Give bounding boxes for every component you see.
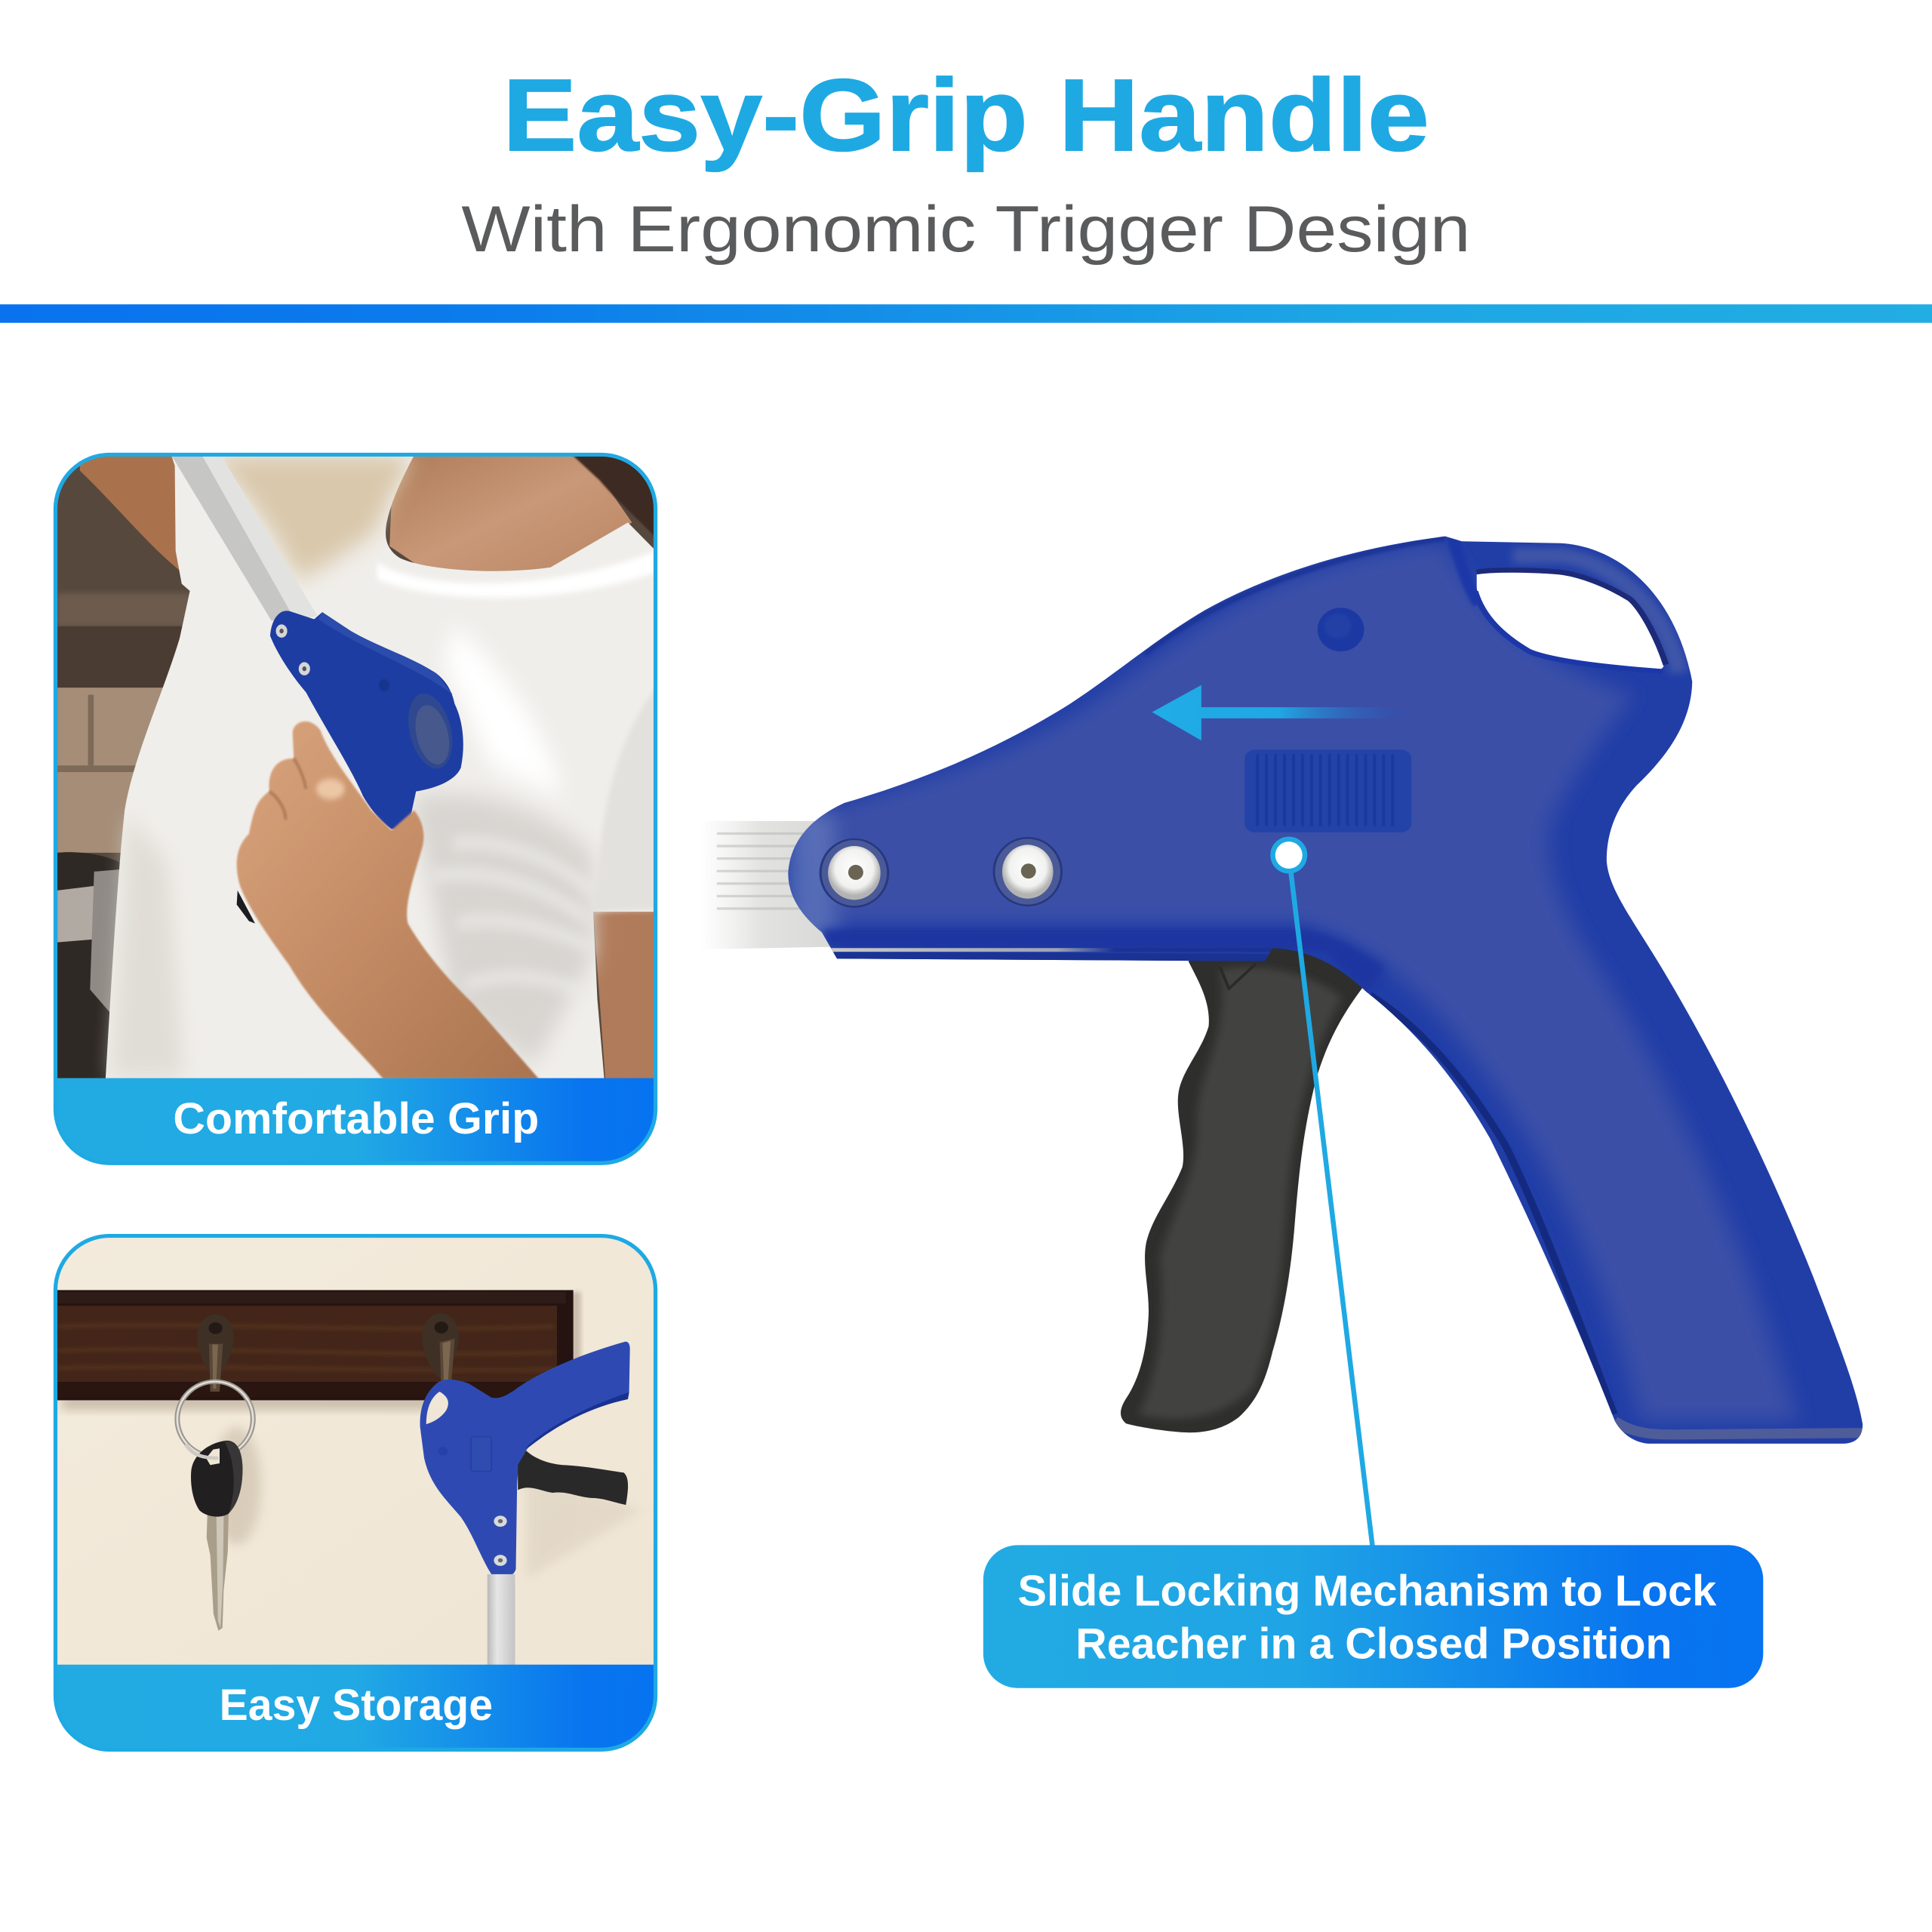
- card border: [55, 1236, 656, 1749]
- slide lock: [1244, 749, 1411, 832]
- reacher shaft: [171, 456, 318, 620]
- key blade: [207, 1514, 229, 1631]
- blue handle: [270, 611, 463, 829]
- key fob: [191, 1441, 242, 1517]
- label: easy storage: Easy Storage: [220, 1681, 493, 1730]
- hook 1: [197, 1315, 233, 1392]
- photo: reacher on key rack: [45, 1223, 681, 1753]
- skin: neck and chest: [389, 452, 632, 575]
- panel: comfortable grip: [45, 438, 681, 1167]
- blue reacher handle: [420, 1342, 630, 1577]
- black trigger: [1121, 942, 1364, 1432]
- skin: raised arm: [80, 452, 182, 572]
- callout leader line: [1289, 855, 1373, 1548]
- sliding direction arrow: [1152, 685, 1404, 740]
- aluminium shaft: [700, 821, 837, 949]
- blue handle body: [788, 537, 1863, 1444]
- hair: [572, 457, 654, 537]
- header gradient bar: [0, 304, 1932, 323]
- subtitle: With Ergonomic Trigger Design: [461, 193, 1471, 266]
- raised button: [1318, 608, 1364, 651]
- card border: [55, 454, 656, 1163]
- rivet 1: [820, 839, 888, 906]
- footer strip: [54, 1665, 658, 1753]
- aluminium shaft: [488, 1574, 515, 1665]
- white t-shirt: [106, 456, 660, 1079]
- forearm: [593, 912, 654, 1078]
- hook 2: [423, 1313, 459, 1381]
- photo: woman holding reacher: [45, 438, 681, 1167]
- title: Easy-Grip Handle: [503, 57, 1429, 172]
- callout dot: [1273, 839, 1305, 871]
- hand: [237, 721, 539, 1079]
- callout text line 1: Slide Locking Mechanism to Lock: [1018, 1567, 1717, 1615]
- wood rack: [57, 1290, 574, 1400]
- grip loop opening: [1477, 572, 1663, 669]
- key ring: [177, 1382, 253, 1457]
- rivet 2: [994, 838, 1062, 906]
- callout: [983, 1545, 1763, 1688]
- main product: reacher handle: [700, 537, 1863, 1444]
- callout text line 2: Reacher in a Closed Position: [1075, 1620, 1672, 1669]
- label: comfortable grip: Comfortable Grip: [173, 1094, 539, 1143]
- footer strip: [54, 1078, 658, 1167]
- black trigger: [518, 1451, 628, 1505]
- panel: easy storage: [45, 1223, 681, 1753]
